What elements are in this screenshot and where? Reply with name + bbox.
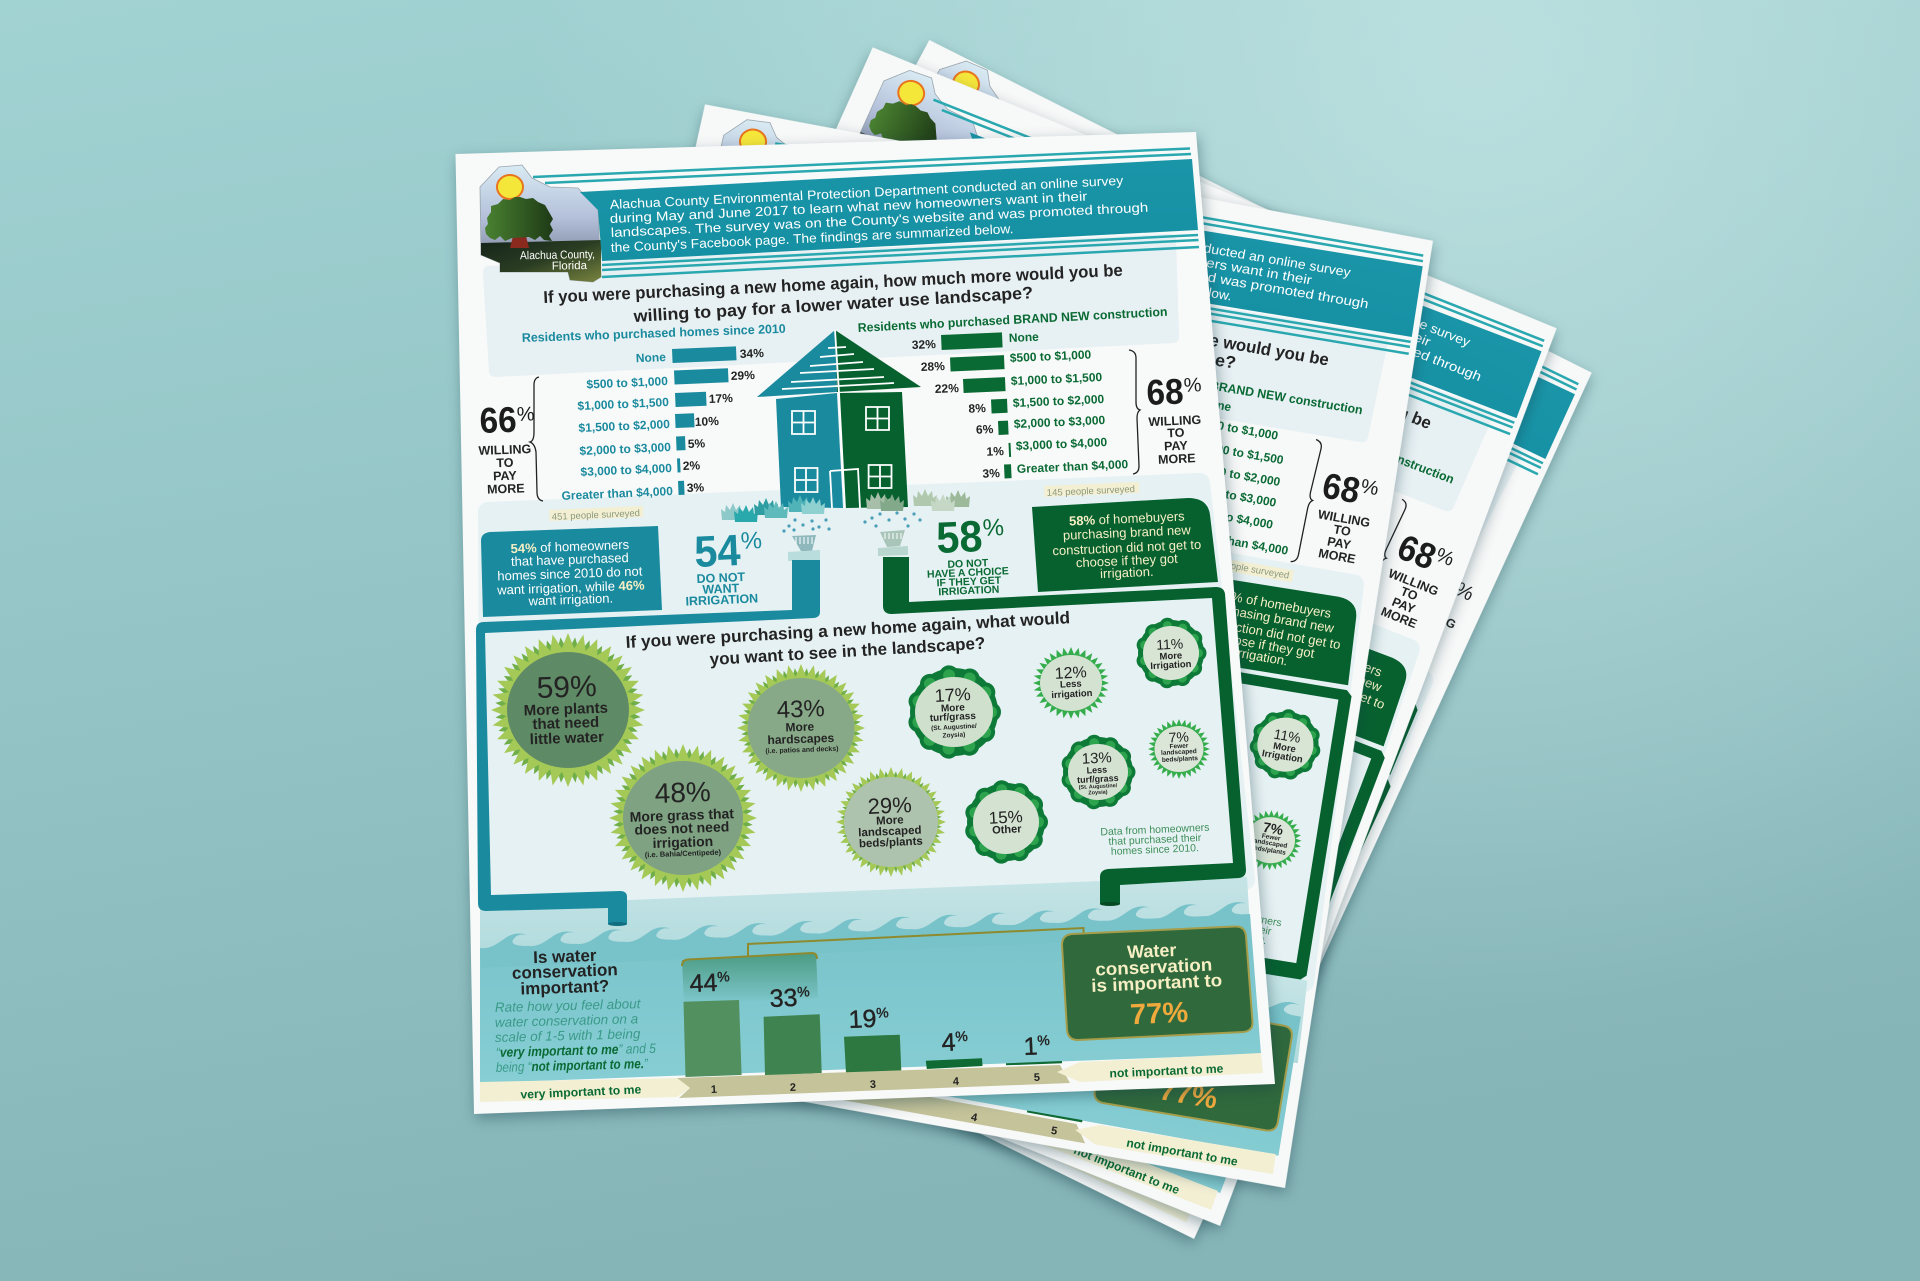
bar chart: homes since 2010: Greater than $4,000 bbox=[561, 484, 673, 503]
teal water pipe frame bbox=[476, 560, 820, 926]
bubble: 12 percent bbox=[1033, 647, 1109, 719]
bubble: 12 percent: Less bbox=[1060, 678, 1082, 691]
callout: 54 percent do not want irrigation bbox=[685, 526, 763, 609]
bar chart: importance rating: 1 bbox=[1023, 1032, 1038, 1061]
bubble: 15 percent: 15% bbox=[988, 807, 1023, 828]
callout: 68 percent willing to pay more: % bbox=[1183, 374, 1202, 397]
text: rating instructions: water conservation on a bbox=[495, 1011, 639, 1030]
bar chart: importance rating: % bbox=[797, 983, 810, 1000]
icon: green bushes bbox=[866, 489, 970, 511]
bubble: 13 percent: (St. Augustine/ bbox=[1079, 783, 1118, 791]
county logo bbox=[480, 165, 601, 282]
back sheet 1: Data from homeowners bbox=[1173, 899, 1283, 929]
icon: green sprinkler bbox=[863, 511, 922, 556]
panel: 54 percent teal text box: want irrigation. bbox=[527, 591, 613, 609]
callout: 68 percent willing to pay more: PAY bbox=[1164, 438, 1189, 454]
back sheet 3: 68 bbox=[1411, 558, 1463, 610]
note: data source: homes since 2010. bbox=[1111, 842, 1199, 858]
bubble: 13 percent: turf/grass bbox=[1077, 773, 1119, 785]
rating scale strip: 5 bbox=[1034, 1072, 1040, 1084]
back sheet 2: % bbox=[1432, 544, 1457, 571]
note: data source: that purchased their bbox=[1108, 832, 1202, 848]
bubble: 59 percent bbox=[488, 630, 648, 790]
heading: landscape question: you want to see in the landscape? bbox=[709, 634, 986, 669]
header band bbox=[533, 148, 1199, 277]
back sheet 2 bbox=[461, 27, 1629, 1253]
back sheet 2: MORE bbox=[1379, 604, 1419, 631]
back sheet 1: MORE bbox=[1317, 546, 1357, 566]
bubble: 7 percent bbox=[1148, 719, 1210, 779]
back sheet 1: If you were purchasing a new home again, how much more would you be bbox=[755, 254, 1331, 370]
back sheet 3 bbox=[458, 21, 1661, 1265]
back sheet 1: landscaped bbox=[1251, 837, 1288, 850]
back sheet 1: $1,000 to $1,500 bbox=[1192, 438, 1285, 467]
bubble: 43 percent: (i.e. patios and decks) bbox=[765, 746, 839, 755]
callout: 68 percent willing to pay more: 68 bbox=[1146, 370, 1184, 413]
bar chart: importance rating: % bbox=[717, 968, 730, 985]
bubble: 7 percent: Fewer bbox=[1169, 742, 1189, 750]
bubble: 11 percent: More bbox=[1159, 650, 1182, 663]
callout: water conservation is important to 77 percent: is important to bbox=[1091, 970, 1223, 996]
back sheet 1: PAY bbox=[1326, 534, 1353, 552]
callout: 58 percent no choice: IF THEY GET bbox=[936, 575, 1002, 589]
bubble: 29 percent: landscaped bbox=[858, 825, 922, 839]
bubble: 12 percent: 12% bbox=[1054, 664, 1087, 683]
bar chart: brand new construction: 22% bbox=[935, 381, 959, 396]
bubble: 15 percent: Other bbox=[992, 823, 1023, 837]
bubble: 48 percent: (i.e. Bahia/Centipede) bbox=[645, 848, 722, 859]
bar chart: brand new construction: 6% bbox=[976, 422, 994, 437]
text: rating instructions: scale of 1-5 with 1 being bbox=[495, 1026, 641, 1045]
panel: 58 percent green text box: purchasing brand new bbox=[1063, 522, 1192, 543]
bubble: 11 percent: Irrigation bbox=[1150, 659, 1192, 672]
icon: teal bushes bbox=[721, 495, 825, 522]
heading: is water conservation important: important? bbox=[520, 976, 610, 999]
back sheet 1: $1,500 to $2,000 bbox=[1189, 460, 1282, 489]
bubble: 43 percent bbox=[735, 662, 867, 794]
back sheet 1: very important to me bbox=[546, 1031, 666, 1065]
back sheet 1: homes since 2010. bbox=[1179, 920, 1268, 947]
back sheet 2: If you were purchasing a new home again, how much more would you be bbox=[887, 205, 1434, 433]
text: rating instructions: being “not important to me.” bbox=[496, 1056, 648, 1075]
heading: is water conservation important: Is water bbox=[533, 946, 597, 967]
back sheet 1: during May and June 2017 to learn what new homeowners want in their bbox=[839, 193, 1314, 288]
front sheet bbox=[456, 132, 1275, 1114]
bubble: 17 percent: (St. Augustine/ bbox=[931, 723, 977, 732]
callout: water conservation is important to 77 percent bbox=[1062, 926, 1253, 1040]
bar chart: brand new construction: 3% bbox=[982, 466, 1000, 481]
bubble: 17 percent: 17% bbox=[934, 684, 971, 706]
bar chart: homes since 2010 bbox=[561, 346, 764, 503]
rating scale strip: 3 bbox=[870, 1079, 876, 1091]
intro text: during May and June 2017 to learn what new homeowners want in their bbox=[609, 188, 1088, 226]
back sheet 1: 7% bbox=[1262, 819, 1285, 838]
paper bbox=[456, 132, 1275, 1114]
text: rating instructions: Rate how you feel about bbox=[495, 996, 642, 1015]
back sheet 2: purchasing brand new bbox=[1260, 634, 1385, 695]
water section background bbox=[479, 876, 1261, 1083]
bar chart: homes since 2010: 3% bbox=[687, 480, 705, 495]
back sheet 1: 68 bbox=[1319, 465, 1363, 511]
bar chart: homes since 2010: None bbox=[636, 350, 666, 365]
bar chart: brand new construction: 1% bbox=[986, 444, 1004, 459]
back sheet 1: Greater than $4,000 bbox=[1177, 525, 1290, 558]
bubble: 12 percent: irrigation bbox=[1051, 688, 1093, 701]
back sheet 1: 4 bbox=[970, 1112, 979, 1125]
panel: 54 percent teal text box: 54% of homeowners bbox=[510, 537, 630, 556]
back sheet 3: % bbox=[1451, 578, 1477, 606]
back sheet 2: WILLING bbox=[1386, 566, 1441, 599]
back sheet 1: purchasing brand new bbox=[1206, 599, 1336, 636]
callout: 66 percent willing to pay more: PAY bbox=[493, 469, 518, 483]
callout: 54 percent do not want irrigation: % bbox=[740, 527, 763, 555]
intro text: Alachua County Environmental Protection Department conducted an online survey bbox=[609, 173, 1124, 212]
logo caption: Florida bbox=[552, 260, 588, 273]
subheading: residents since 2010: Residents who purchased homes since 2010 bbox=[522, 322, 786, 345]
back sheet 1: willing to pay for a lower water use landscape? bbox=[838, 292, 1238, 373]
heading: is water conservation important bbox=[512, 946, 618, 999]
back sheet 2: Residents who purchased BRAND NEW construction bbox=[1162, 363, 1456, 487]
callout: 68 percent willing to pay more bbox=[1129, 350, 1202, 474]
bar chart: importance rating: 44 bbox=[689, 969, 718, 998]
bubble: 48 percent: 48% bbox=[654, 776, 711, 809]
bar chart: homes since 2010: 5% bbox=[688, 436, 706, 451]
rating scale strip: 4 bbox=[953, 1076, 960, 1088]
bar chart: brand new construction: $3,000 to $4,000 bbox=[1016, 435, 1108, 453]
callout: 58 percent no choice bbox=[927, 512, 1009, 598]
bar chart: homes since 2010: $2,000 to $3,000 bbox=[579, 440, 671, 458]
panel: 58 percent green text box: 58% of homebuyers bbox=[1069, 508, 1185, 529]
back sheet 1: beds/plants bbox=[1250, 844, 1287, 857]
back sheet 2: construction did not get to bbox=[1243, 644, 1387, 712]
back sheet 1: 11% bbox=[1272, 726, 1302, 746]
bubble: 7 percent: beds/plants bbox=[1162, 755, 1199, 764]
panel: 54 percent teal text box: want irrigation, while 46% bbox=[496, 577, 645, 598]
bar chart: brand new construction: Greater than $4,000 bbox=[1017, 457, 1129, 476]
bar chart: brand new construction bbox=[912, 330, 1129, 481]
bar chart: brand new construction: 8% bbox=[968, 401, 986, 416]
back sheet 1: None bbox=[1200, 395, 1233, 414]
callout: 58 percent no choice: IRRIGATION bbox=[938, 584, 1000, 598]
callout: 54 percent do not want irrigation: WANT bbox=[702, 581, 740, 597]
bar chart: brand new construction: None bbox=[1009, 330, 1039, 345]
rating scale strip: 1 bbox=[711, 1084, 717, 1096]
bar chart: importance rating: 19 bbox=[848, 1005, 877, 1034]
panel: 58 percent green text box: construction did not get to bbox=[1052, 537, 1201, 558]
bubble: 7 percent: 7% bbox=[1168, 728, 1189, 746]
heading: is water conservation important: conservation bbox=[512, 960, 618, 983]
bubble: 17 percent: Zoysia) bbox=[942, 731, 965, 740]
rating scale strip: very important to me bbox=[520, 1082, 642, 1102]
callout: 66 percent willing to pay more: % bbox=[516, 403, 535, 426]
icon: teal sprinkler bbox=[782, 518, 831, 561]
back sheet 1: $2,000 to $3,000 bbox=[1185, 480, 1278, 510]
bubble: 7 percent: landscaped bbox=[1161, 748, 1197, 757]
callout: 66 percent willing to pay more: MORE bbox=[487, 481, 525, 497]
bubble: 13 percent: 13% bbox=[1081, 749, 1112, 768]
bar chart: homes since 2010: 2% bbox=[683, 458, 701, 473]
bar chart: homes since 2010: 17% bbox=[709, 391, 733, 406]
heading: willingness to pay question bbox=[543, 261, 1123, 326]
callout: 58 percent no choice: 58 bbox=[935, 512, 983, 563]
back sheet 2: Alachua County Environmental Protection Department conducted an online survey bbox=[989, 149, 1473, 350]
panel: 54 percent teal text box: homes since 2010 do not bbox=[497, 563, 643, 584]
callout: water conservation is important to 77 percent: 77% bbox=[1129, 997, 1189, 1031]
label: 145 people surveyed: 145 people surveyed bbox=[1047, 484, 1135, 499]
rating scale strip: 2 bbox=[790, 1082, 796, 1094]
callout: 68 percent willing to pay more: TO bbox=[1167, 426, 1185, 440]
bar chart: homes since 2010: 29% bbox=[731, 368, 755, 383]
bubble: 43 percent: hardscapes bbox=[767, 731, 835, 747]
back sheet 1 bbox=[690, 104, 1440, 1198]
callout: 66 percent willing to pay more bbox=[478, 377, 543, 501]
back sheet 1: More bbox=[1272, 741, 1297, 755]
bracket: top two ratings highlight bbox=[682, 928, 1084, 1004]
callout: 68 percent willing to pay more: MORE bbox=[1158, 451, 1196, 467]
bubble: 43 percent: More bbox=[785, 719, 815, 734]
bubble: 17 percent bbox=[910, 668, 998, 756]
back sheet 1: Fewer bbox=[1261, 833, 1281, 843]
panel: 54 percent teal text box: that have purchased bbox=[511, 550, 629, 569]
bubble: 48 percent bbox=[607, 742, 759, 894]
panel: question one background bbox=[489, 240, 1173, 371]
back sheet 1: irrigation. bbox=[1234, 645, 1289, 668]
panel: 54 percent teal text box bbox=[481, 526, 662, 617]
bubble: 13 percent: Less bbox=[1086, 764, 1107, 776]
back sheet 1: % bbox=[1359, 476, 1381, 500]
bubble: 48 percent: More grass that bbox=[629, 805, 735, 825]
bar chart: importance rating: 33 bbox=[769, 984, 798, 1013]
back sheet 2: landscapes. The survey was on the County's website and was promoted through bbox=[978, 175, 1484, 384]
back sheet 1: 5 bbox=[1050, 1125, 1058, 1138]
callout: 66 percent willing to pay more: TO bbox=[496, 456, 514, 470]
bar chart: homes since 2010: $3,000 to $4,000 bbox=[580, 461, 672, 479]
bubble: 29 percent: beds/plants bbox=[859, 836, 923, 850]
back sheet 1: 145 people surveyed bbox=[1201, 556, 1290, 582]
text: rating instructions: “very important to me” and 5 bbox=[496, 1041, 656, 1060]
callout: 58 percent no choice: % bbox=[982, 514, 1005, 542]
back sheet 1: not important to me bbox=[1125, 1136, 1239, 1169]
back sheet 1: $500 to $1,000 bbox=[1196, 415, 1280, 443]
bar chart: brand new construction: $500 to $1,000 bbox=[1010, 347, 1092, 365]
note: data source: Data from homeowners bbox=[1100, 822, 1210, 838]
callout: water conservation is important to 77 percent: Water bbox=[1127, 940, 1177, 962]
back sheet 1: $3,000 to $4,000 bbox=[1182, 502, 1275, 532]
bubble: 29 percent: 29% bbox=[867, 792, 912, 819]
heading: willingness to pay question: willing to pay for a lower water use landscape? bbox=[632, 283, 1034, 326]
text: rating instructions bbox=[495, 996, 656, 1075]
intro text bbox=[609, 173, 1149, 255]
bar chart: brand new construction: 28% bbox=[921, 359, 945, 374]
icon: oak tree bbox=[485, 197, 553, 248]
note: data source bbox=[1100, 822, 1210, 858]
bubble: 59 percent: little water bbox=[529, 729, 604, 748]
back sheet 1: Residents who purchased BRAND NEW construction bbox=[1055, 353, 1364, 417]
back sheet 1: Irrigation bbox=[1261, 748, 1304, 766]
bubble: 59 percent: 59% bbox=[536, 670, 597, 705]
heading: landscape question: If you were purchasing a new home again, what would bbox=[625, 608, 1071, 652]
bubble: 15 percent bbox=[967, 783, 1045, 861]
back sheet 1: that purchased their bbox=[1179, 910, 1273, 938]
bar chart: brand new construction: 32% bbox=[912, 337, 936, 352]
bubble: 43 percent: 43% bbox=[776, 695, 825, 724]
icon: sun bbox=[497, 175, 523, 199]
bubble: 59 percent: that need bbox=[532, 714, 599, 733]
back sheet 1: WILLING bbox=[1317, 507, 1371, 530]
bubble: 11 percent bbox=[1138, 620, 1204, 686]
back sheet 1: landscapes. The survey was on the County's website and was promoted through bbox=[837, 207, 1370, 311]
logo caption: Alachua County, bbox=[520, 249, 595, 262]
back sheet 1: Alachua County Environmental Protection Department conducted an online survey bbox=[842, 179, 1352, 280]
callout: 66 percent willing to pay more: 66 bbox=[479, 399, 517, 441]
label: 451 people surveyed: 451 people surveyed bbox=[552, 508, 640, 523]
intro text: landscapes. The survey was on the County's website and was promoted through bbox=[610, 200, 1149, 240]
back sheet 1: 58% of homebuyers bbox=[1216, 587, 1333, 621]
bubble: 59 percent: More plants bbox=[523, 700, 608, 719]
callout: 54 percent do not want irrigation: IRRIGATION bbox=[685, 591, 758, 609]
heading: willingness to pay question: If you were purchasing a new home again, how much more would you be bbox=[543, 261, 1123, 307]
logo caption bbox=[520, 249, 595, 273]
bubble: 17 percent: More bbox=[941, 702, 966, 715]
bar chart: brand new construction: $2,000 to $3,000 bbox=[1014, 413, 1106, 431]
back sheet 1: TO bbox=[1332, 522, 1352, 539]
bar chart: importance rating: % bbox=[876, 1004, 889, 1021]
back sheet 2: TO bbox=[1398, 584, 1420, 603]
panel: 58 percent green text box: irrigation. bbox=[1100, 564, 1154, 581]
intro text: the County's Facebook page. The findings are summarized below. bbox=[610, 221, 1014, 255]
back sheet 1: choose if they got bbox=[1213, 629, 1316, 661]
green water pipe frame bbox=[883, 557, 1246, 906]
back sheet 1: the County's Facebook page. The findings are summarized below. bbox=[833, 221, 1233, 304]
bubble: 29 percent bbox=[835, 766, 947, 878]
bubble: 13 percent: Zoysia) bbox=[1088, 789, 1108, 797]
bar chart: importance rating: % bbox=[955, 1028, 968, 1044]
bar chart: homes since 2010: $500 to $1,000 bbox=[586, 374, 668, 392]
bubble: 11 percent: 11% bbox=[1156, 635, 1184, 653]
icon: house bbox=[757, 330, 921, 508]
callout: 68 percent willing to pay more: WILLING bbox=[1148, 413, 1201, 429]
rating scale strip: not important to me bbox=[1109, 1062, 1224, 1080]
subheading: brand new construction: Residents who purchased BRAND NEW construction bbox=[857, 305, 1168, 335]
bubble: 17 percent: turf/grass bbox=[930, 711, 977, 724]
bar chart: importance rating: 4 bbox=[941, 1028, 956, 1057]
back sheet 2: 58% of homebuyers bbox=[1271, 623, 1385, 680]
callout: 54 percent do not want irrigation: DO NOT bbox=[696, 570, 746, 586]
back sheet 2: PAY bbox=[1390, 595, 1418, 617]
back sheet 1: 77% bbox=[1157, 1074, 1220, 1116]
back sheet 1: construction did not get to bbox=[1192, 612, 1342, 652]
bubble: 13 percent bbox=[1063, 737, 1133, 807]
back sheet 2: during May and June 2017 to learn what new homeowners want in their bbox=[983, 162, 1434, 349]
bar chart: brand new construction: $1,500 to $2,000 bbox=[1013, 392, 1105, 410]
bar chart: homes since 2010: $1,500 to $2,000 bbox=[578, 417, 670, 435]
back sheet 2: not important to me bbox=[1072, 1143, 1182, 1197]
bar chart: homes since 2010: 34% bbox=[740, 346, 764, 361]
bar chart: importance rating bbox=[682, 928, 1084, 1077]
bubble: 48 percent: irrigation bbox=[652, 833, 713, 851]
callout: 66 percent willing to pay more: WILLING bbox=[478, 442, 531, 458]
bar chart: brand new construction: $1,000 to $1,500 bbox=[1011, 370, 1103, 388]
rating scale strip bbox=[480, 1053, 1263, 1102]
callout: 58 percent no choice: DO NOT bbox=[947, 557, 989, 571]
panel: 58 percent green text box bbox=[1032, 498, 1218, 592]
bar chart: homes since 2010: 10% bbox=[695, 414, 719, 429]
bar chart: homes since 2010: $1,000 to $1,500 bbox=[577, 395, 669, 413]
back sheet 2: 68 bbox=[1392, 526, 1442, 578]
callout: 54 percent do not want irrigation: 54 bbox=[693, 526, 742, 577]
callout: 58 percent no choice: HAVE A CHOICE bbox=[927, 565, 1009, 581]
bar chart: importance rating: % bbox=[1037, 1032, 1050, 1048]
bubble: 29 percent: More bbox=[876, 814, 904, 828]
back sheet 3: WILLING bbox=[1404, 596, 1458, 632]
panel: irrigation and landscape background bbox=[488, 483, 1245, 905]
bubble: 48 percent: does not need bbox=[634, 818, 730, 838]
callout: water conservation is important to 77 percent: conservation bbox=[1095, 954, 1213, 980]
panel: 58 percent green text box: choose if they got bbox=[1076, 551, 1178, 570]
back sheet 3: Residents who purchased BRAND NEW construction bbox=[1195, 376, 1481, 522]
